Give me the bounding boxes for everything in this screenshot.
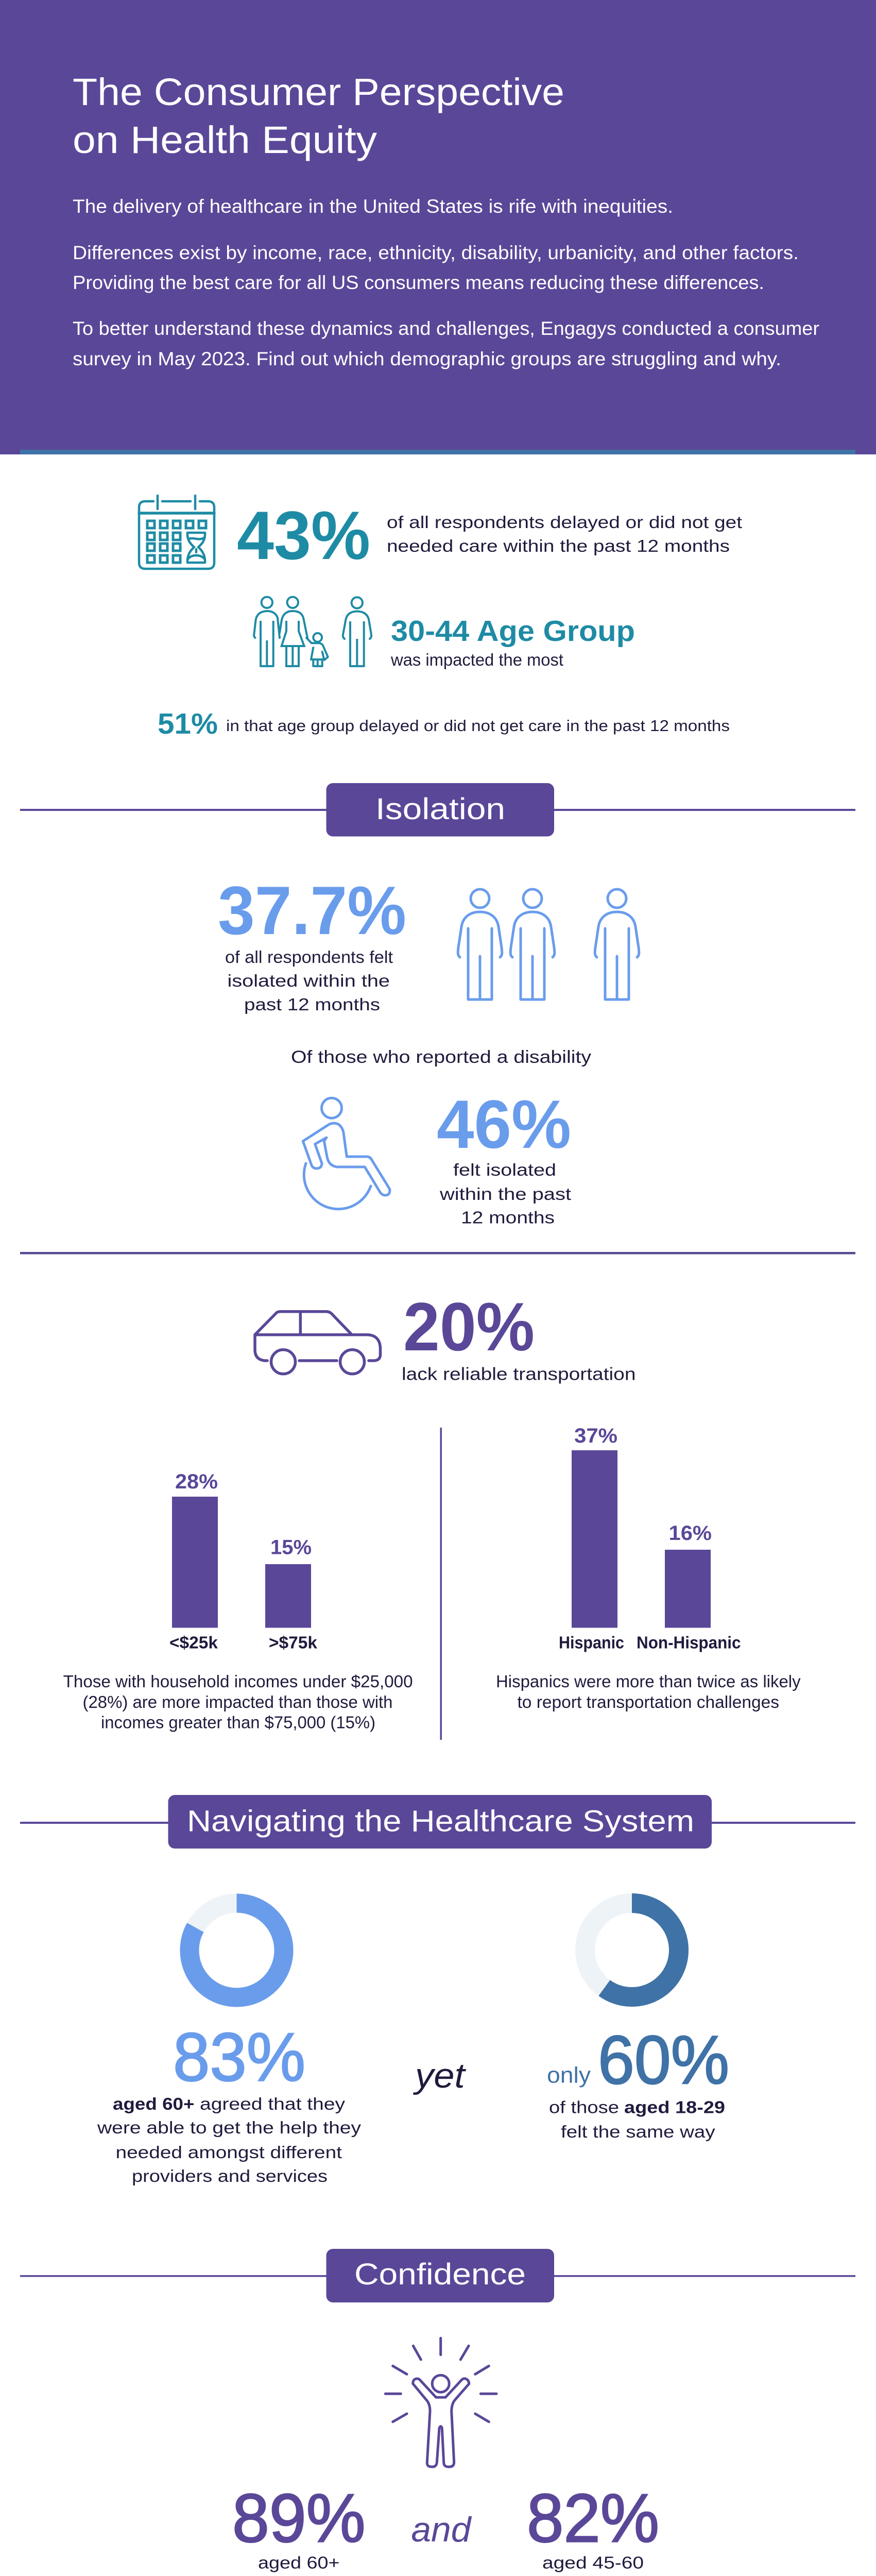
donut chart: 83% bbox=[190, 1903, 284, 1997]
stat: 83%: 83% bbox=[173, 2020, 305, 2096]
title: The Consumer Perspective bbox=[73, 71, 564, 113]
bar chart: ethnicity: 37% bbox=[574, 1425, 617, 1447]
text block: 37.7% description: of all respondents felt bbox=[225, 947, 393, 967]
stat: 89%: 89% bbox=[232, 2480, 366, 2556]
text block: intro: To better understand these dynamics and challenges, Engagys conducted a consumer bbox=[73, 318, 819, 339]
text block: 60% description bbox=[549, 2098, 725, 2141]
text block: 46% description: felt isolated bbox=[453, 1160, 556, 1179]
text block: intro bbox=[73, 196, 819, 369]
text block: 60% description: aged 18-29 bbox=[624, 2098, 725, 2116]
title: on Health Equity bbox=[73, 118, 377, 161]
heading: Isolation: Isolation bbox=[375, 792, 505, 826]
text block: ethnicity note: to report transportation challenges bbox=[517, 1692, 779, 1711]
text block: 37.7% description: isolated within the bbox=[228, 971, 390, 990]
panel: delayed care bbox=[139, 496, 742, 740]
text: aged 60+: aged 60+ bbox=[258, 2553, 340, 2572]
text block: 43% description: needed care within the past 12 months bbox=[387, 536, 730, 555]
stat: 82%: 82% bbox=[527, 2480, 659, 2556]
text block: ethnicity note bbox=[496, 1672, 801, 1711]
bar chart: ethnicity: Non-Hispanic bbox=[637, 1633, 741, 1652]
text: was impacted the most: was impacted the most bbox=[390, 650, 563, 669]
text block: 60% description: felt the same way bbox=[561, 2122, 715, 2141]
stat: 51%: 51% bbox=[158, 707, 218, 740]
text block: ethnicity note: Hispanics were more than twice as likely bbox=[496, 1672, 801, 1691]
heading: Navigating the Healthcare System: Navigating the Healthcare System bbox=[187, 1804, 694, 1838]
icon: person with raised arms bbox=[385, 2338, 496, 2467]
stat: 30-44 age group: 30-44 Age Group bbox=[391, 615, 635, 648]
icon: family bbox=[254, 597, 371, 666]
icon: wheelchair bbox=[303, 1098, 390, 1209]
icon: three people bbox=[458, 889, 639, 999]
panel: confidence bbox=[220, 2338, 659, 2576]
text block: 46% description bbox=[439, 1160, 571, 1227]
text block: 83% description: aged 60+ bbox=[113, 2094, 195, 2113]
text block: 46% description: 12 months bbox=[461, 1208, 555, 1227]
stat: 20%: 20% bbox=[403, 1289, 535, 1365]
text: aged 45-60: aged 45-60 bbox=[542, 2553, 644, 2572]
text block: 37.7% description bbox=[225, 947, 393, 1014]
heading: Isolation bbox=[20, 783, 855, 837]
stat: 43%: 43% bbox=[237, 498, 370, 574]
stat: 37.7%: 37.7% bbox=[218, 873, 406, 949]
bar chart: ethnicity bbox=[559, 1425, 741, 1652]
bar chart: income: >$75k bbox=[269, 1633, 318, 1652]
text block: intro: The delivery of healthcare in the United States is rife with inequities. bbox=[73, 196, 673, 217]
panel: isolation bbox=[218, 873, 639, 1227]
text block: 83% description: agreed that they bbox=[200, 2094, 346, 2113]
text block: income note: (28%) are more impacted than those with bbox=[82, 1692, 392, 1711]
text: yet: yet bbox=[413, 2056, 467, 2095]
bar chart: income bbox=[169, 1470, 318, 1652]
text: lack reliable transportation: lack reliable transportation bbox=[402, 1364, 635, 1384]
text block: 46% description: within the past bbox=[439, 1184, 571, 1204]
heading: Confidence bbox=[20, 2249, 855, 2302]
text block: 37.7% description: past 12 months bbox=[244, 995, 380, 1014]
stat: 46%: 46% bbox=[437, 1087, 571, 1163]
panel: transportation bbox=[63, 1289, 801, 1740]
text block: intro: Differences exist by income, race, ethnicity, disability, urbanicity, and other factors. bbox=[73, 242, 799, 263]
text: only: only bbox=[547, 2063, 591, 2088]
text block: intro: Providing the best care for all US consumers means reducing these differences. bbox=[73, 272, 764, 293]
icon: car bbox=[255, 1312, 380, 1374]
text block: income note bbox=[63, 1672, 413, 1732]
donut chart: 60% bbox=[585, 1903, 679, 1997]
text: of those who reported a disability: Of those who reported a disability bbox=[291, 1047, 591, 1067]
panel: header bbox=[0, 0, 876, 454]
text block: income note: incomes greater than $75,000 (15%) bbox=[101, 1713, 375, 1732]
bar chart: income: 28% bbox=[175, 1470, 218, 1493]
bar chart: ethnicity: Hispanic bbox=[559, 1633, 624, 1652]
text block: 43% description: of all respondents delayed or did not get bbox=[387, 513, 742, 532]
text block: 83% description bbox=[97, 2094, 362, 2185]
stat: 60%: 60% bbox=[598, 2022, 729, 2098]
text block: 43% description bbox=[387, 513, 742, 555]
title bbox=[73, 71, 564, 161]
text block: 83% description: needed amongst different bbox=[115, 2143, 342, 2162]
heading: Confidence: Confidence bbox=[354, 2258, 526, 2291]
heading: Navigating the Healthcare System bbox=[20, 1795, 855, 1849]
bar chart: ethnicity: 16% bbox=[668, 1522, 712, 1545]
bar chart: income: 15% bbox=[270, 1536, 312, 1559]
text block: 83% description: were able to get the help they bbox=[97, 2118, 362, 2137]
text block: income note: Those with household incomes under $25,000 bbox=[63, 1672, 413, 1691]
text: and: and bbox=[411, 2510, 472, 2549]
text block: 60% description: of those bbox=[549, 2098, 619, 2116]
text block: 83% description: providers and services bbox=[132, 2166, 328, 2185]
text: 51% description: in that age group delayed or did not get care in the past 12 months bbox=[226, 717, 730, 735]
bar chart: income: <$25k bbox=[169, 1633, 218, 1652]
text block: intro: survey in May 2023. Find out which demographic groups are struggling and why. bbox=[73, 348, 781, 369]
icon: calendar with hourglass bbox=[139, 496, 214, 569]
panel: navigating bbox=[97, 1903, 729, 2185]
